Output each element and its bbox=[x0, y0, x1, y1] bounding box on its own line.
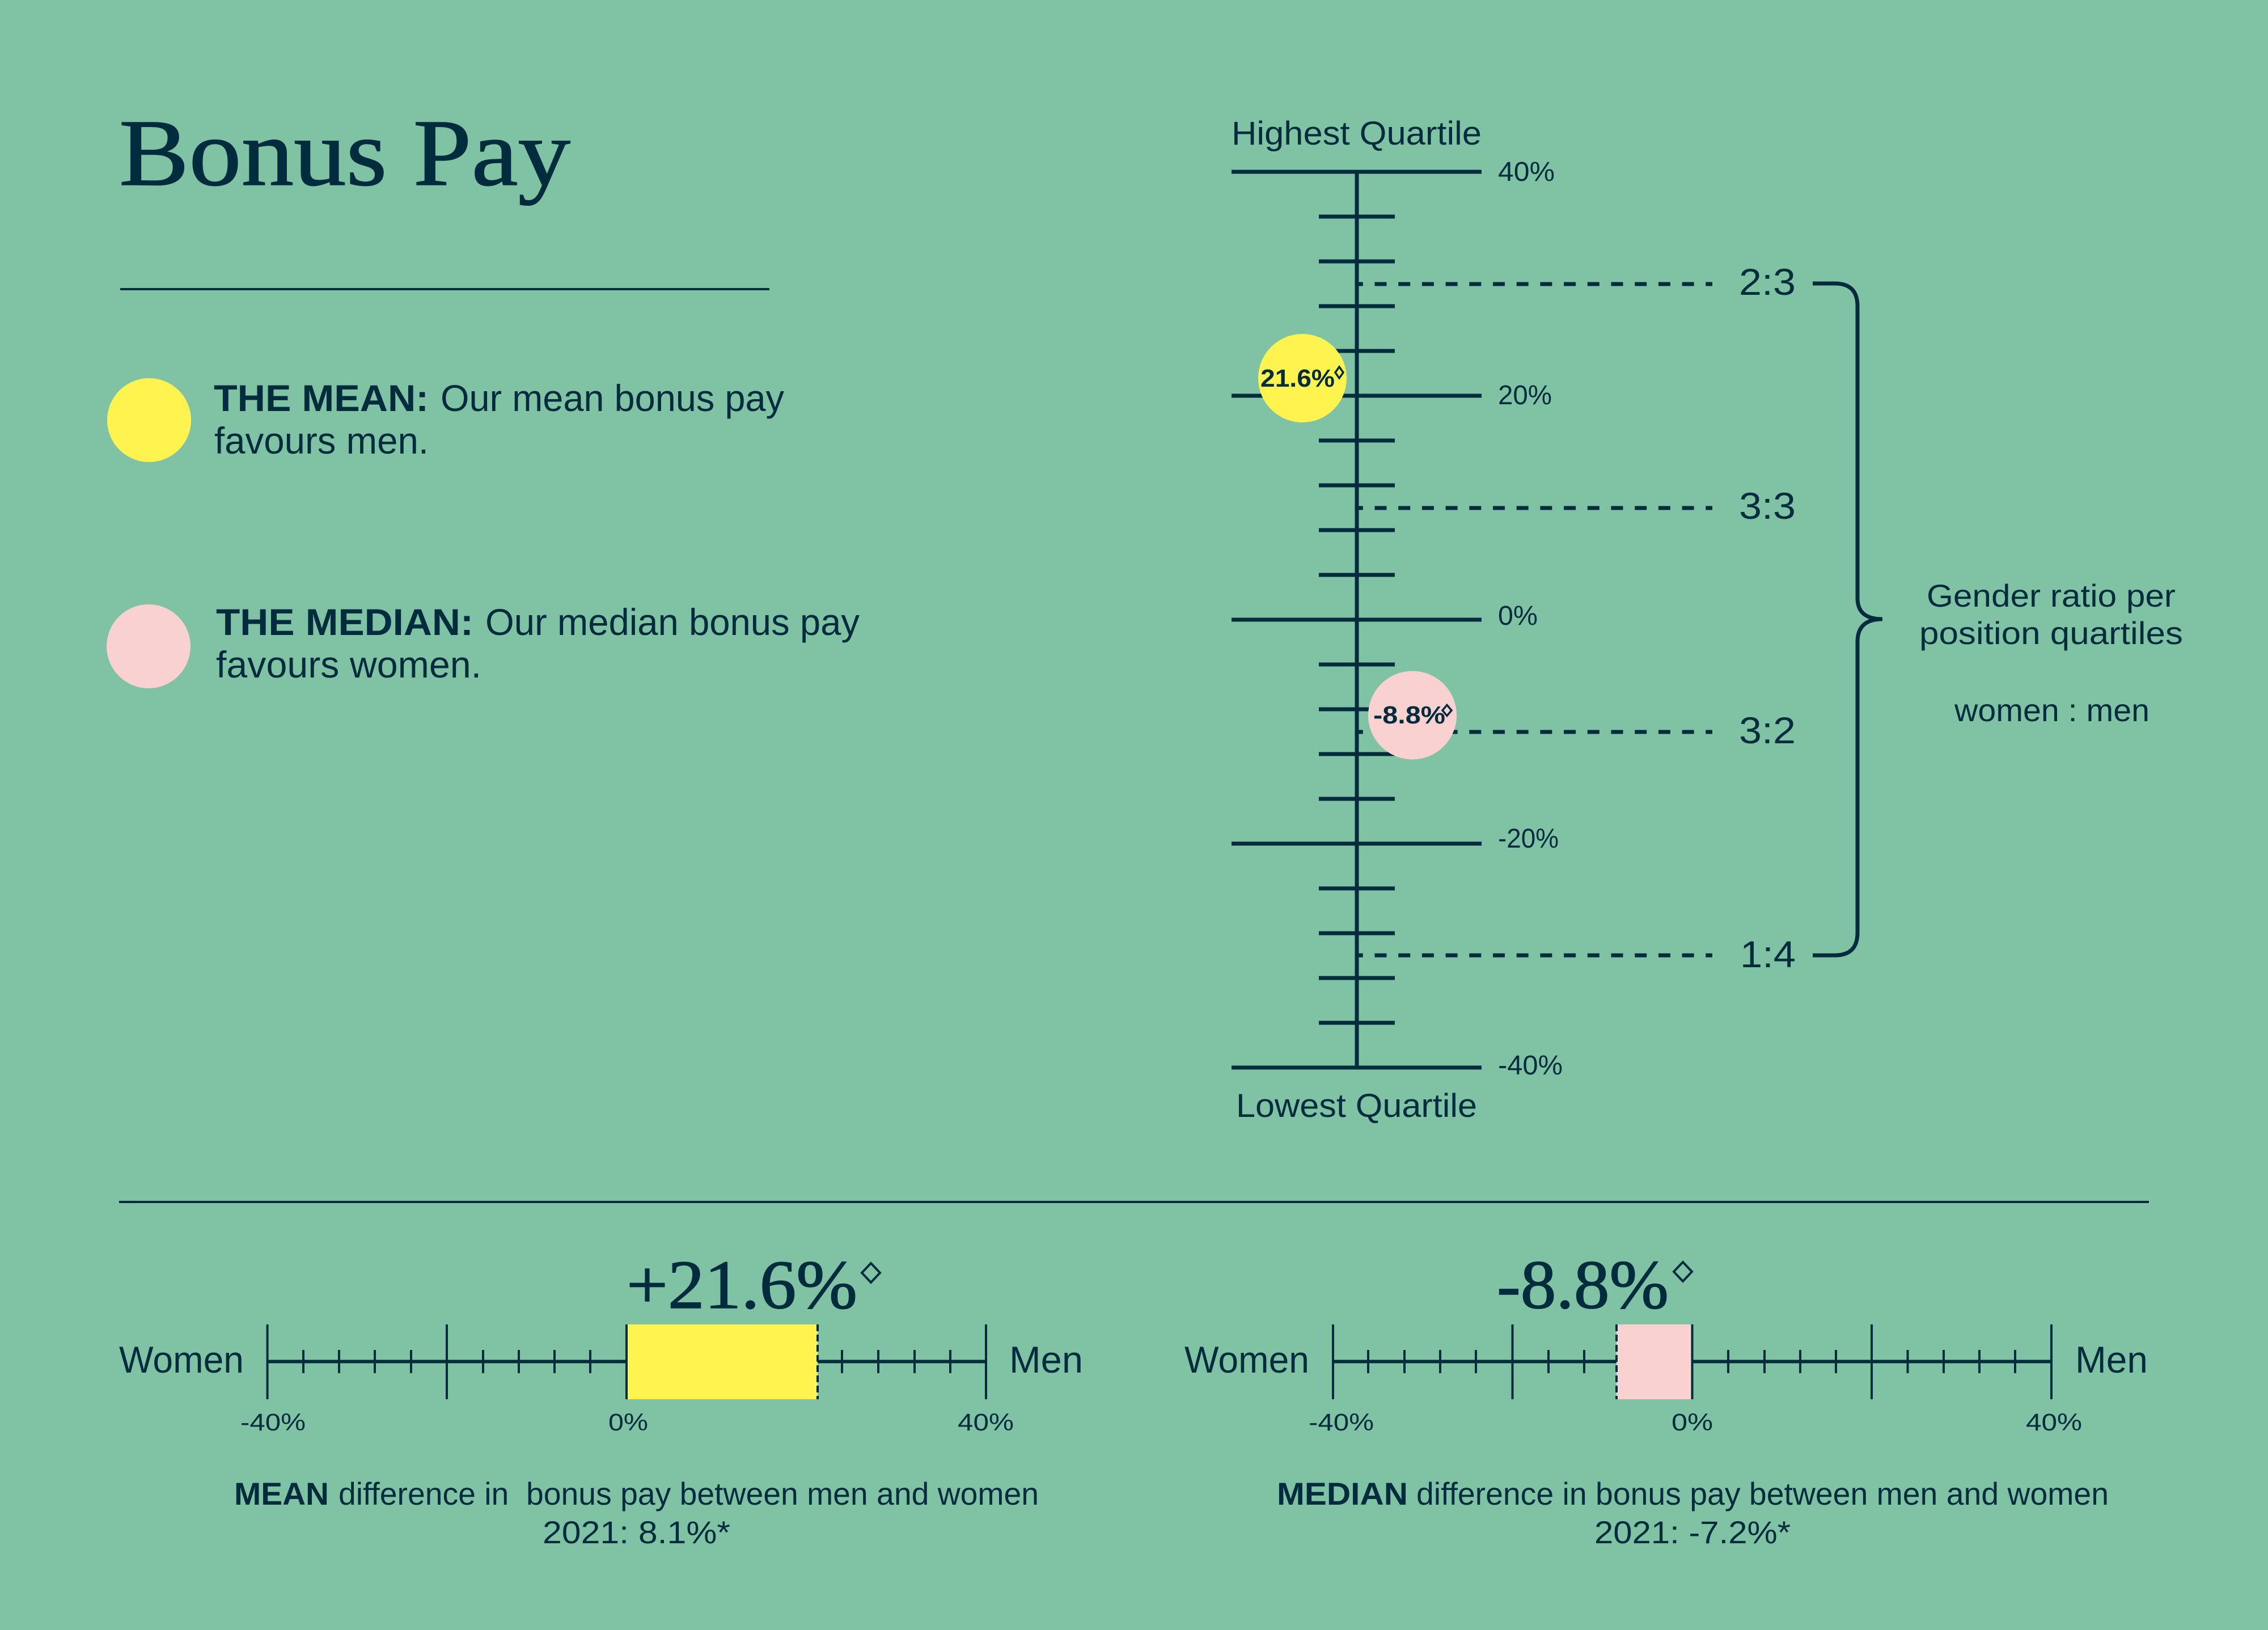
mean caption: MEAN bbox=[234, 1476, 329, 1512]
median legend text: THE MEDIAN: bbox=[216, 601, 473, 643]
gender ratios: 3:2 bbox=[1739, 709, 1796, 751]
heading: lowest quartile: Lowest Quartile bbox=[1236, 1087, 1477, 1124]
gender ratio caption: Gender ratio per bbox=[1927, 578, 2176, 613]
mean legend text: Our mean bonus pay bbox=[441, 377, 784, 419]
men label: Men bbox=[2075, 1339, 2148, 1381]
mean legend text: THE MEAN: bbox=[214, 377, 429, 419]
scale axis and ticks bbox=[1232, 172, 1482, 1068]
tick labels: 0% bbox=[1672, 1409, 1713, 1436]
axis labels: 0% bbox=[1498, 601, 1538, 631]
dashed connectors to ratios bbox=[1357, 284, 1712, 955]
axis labels: 20% bbox=[1498, 380, 1552, 410]
tick labels: 0% bbox=[608, 1409, 648, 1436]
yellow bar bbox=[627, 1324, 818, 1399]
legend: mean bbox=[107, 377, 784, 462]
median caption bbox=[1277, 1476, 2109, 1550]
bottom chart: median bbox=[1184, 1247, 2148, 1550]
marker: median -8.8%: -8.8% bbox=[1373, 701, 1445, 729]
axis labels: -20% bbox=[1498, 824, 1559, 854]
tick labels bbox=[240, 1409, 1014, 1436]
axis labels: -40% bbox=[1498, 1051, 1563, 1081]
gender ratios: 1:4 bbox=[1740, 933, 1796, 975]
marker: mean 21.6% bbox=[1258, 334, 1347, 422]
mean caption: 2021: 8.1%* bbox=[543, 1514, 730, 1550]
pink bar bbox=[1617, 1324, 1692, 1399]
mean caption: difference in bonus pay between men and women bbox=[338, 1476, 1039, 1512]
median legend text: favours women. bbox=[216, 643, 481, 685]
icon: diamond bbox=[1674, 1262, 1692, 1281]
gender ratio caption bbox=[1919, 578, 2183, 728]
gender ratio caption: women : men bbox=[1954, 692, 2149, 728]
median caption: MEDIAN bbox=[1277, 1476, 1408, 1512]
tick labels bbox=[1309, 1409, 2082, 1436]
legend: median bbox=[107, 601, 860, 688]
mean legend text: favours men. bbox=[214, 420, 429, 462]
gender ratios: 2:3 bbox=[1739, 261, 1796, 303]
curly brace bbox=[1813, 283, 1882, 955]
gender ratios bbox=[1739, 261, 1796, 975]
tick labels: 40% bbox=[958, 1409, 1014, 1436]
icon: diamond bbox=[862, 1263, 880, 1282]
heading: highest quartile: Highest Quartile bbox=[1232, 115, 1482, 152]
women label: Women bbox=[119, 1339, 244, 1381]
mean caption bbox=[234, 1476, 1039, 1550]
women label: Women bbox=[1184, 1339, 1309, 1381]
marker: median -8.8% bbox=[1368, 671, 1457, 760]
tick labels: 40% bbox=[2026, 1409, 2082, 1436]
tick labels: -40% bbox=[240, 1409, 306, 1436]
icon: pink median dot bbox=[107, 604, 191, 688]
median caption: difference in bonus pay between men and women bbox=[1416, 1476, 2109, 1512]
median caption: 2021: -7.2%* bbox=[1594, 1514, 1791, 1550]
icon: yellow mean dot bbox=[107, 378, 191, 462]
vertical quartile chart bbox=[1232, 115, 1712, 1124]
gender ratios: 3:3 bbox=[1739, 485, 1796, 527]
marker: mean 21.6%: 21.6% bbox=[1260, 365, 1335, 392]
mean value: +21.6% bbox=[627, 1247, 857, 1323]
median legend text bbox=[216, 601, 860, 685]
median legend text: Our median bonus pay bbox=[485, 601, 860, 643]
mean legend text bbox=[214, 377, 784, 462]
title: Bonus Pay bbox=[119, 100, 570, 206]
median value: -8.8% bbox=[1497, 1247, 1669, 1323]
bottom chart: mean bbox=[119, 1247, 1083, 1550]
axis labels: 40% bbox=[1498, 157, 1555, 187]
gender ratio caption: position quartiles bbox=[1919, 615, 2183, 651]
axis labels bbox=[1498, 157, 1563, 1081]
tick labels: -40% bbox=[1309, 1409, 1374, 1436]
scale bar bbox=[1333, 1324, 2051, 1399]
men label: Men bbox=[1009, 1339, 1083, 1381]
scale bar bbox=[268, 1324, 986, 1399]
